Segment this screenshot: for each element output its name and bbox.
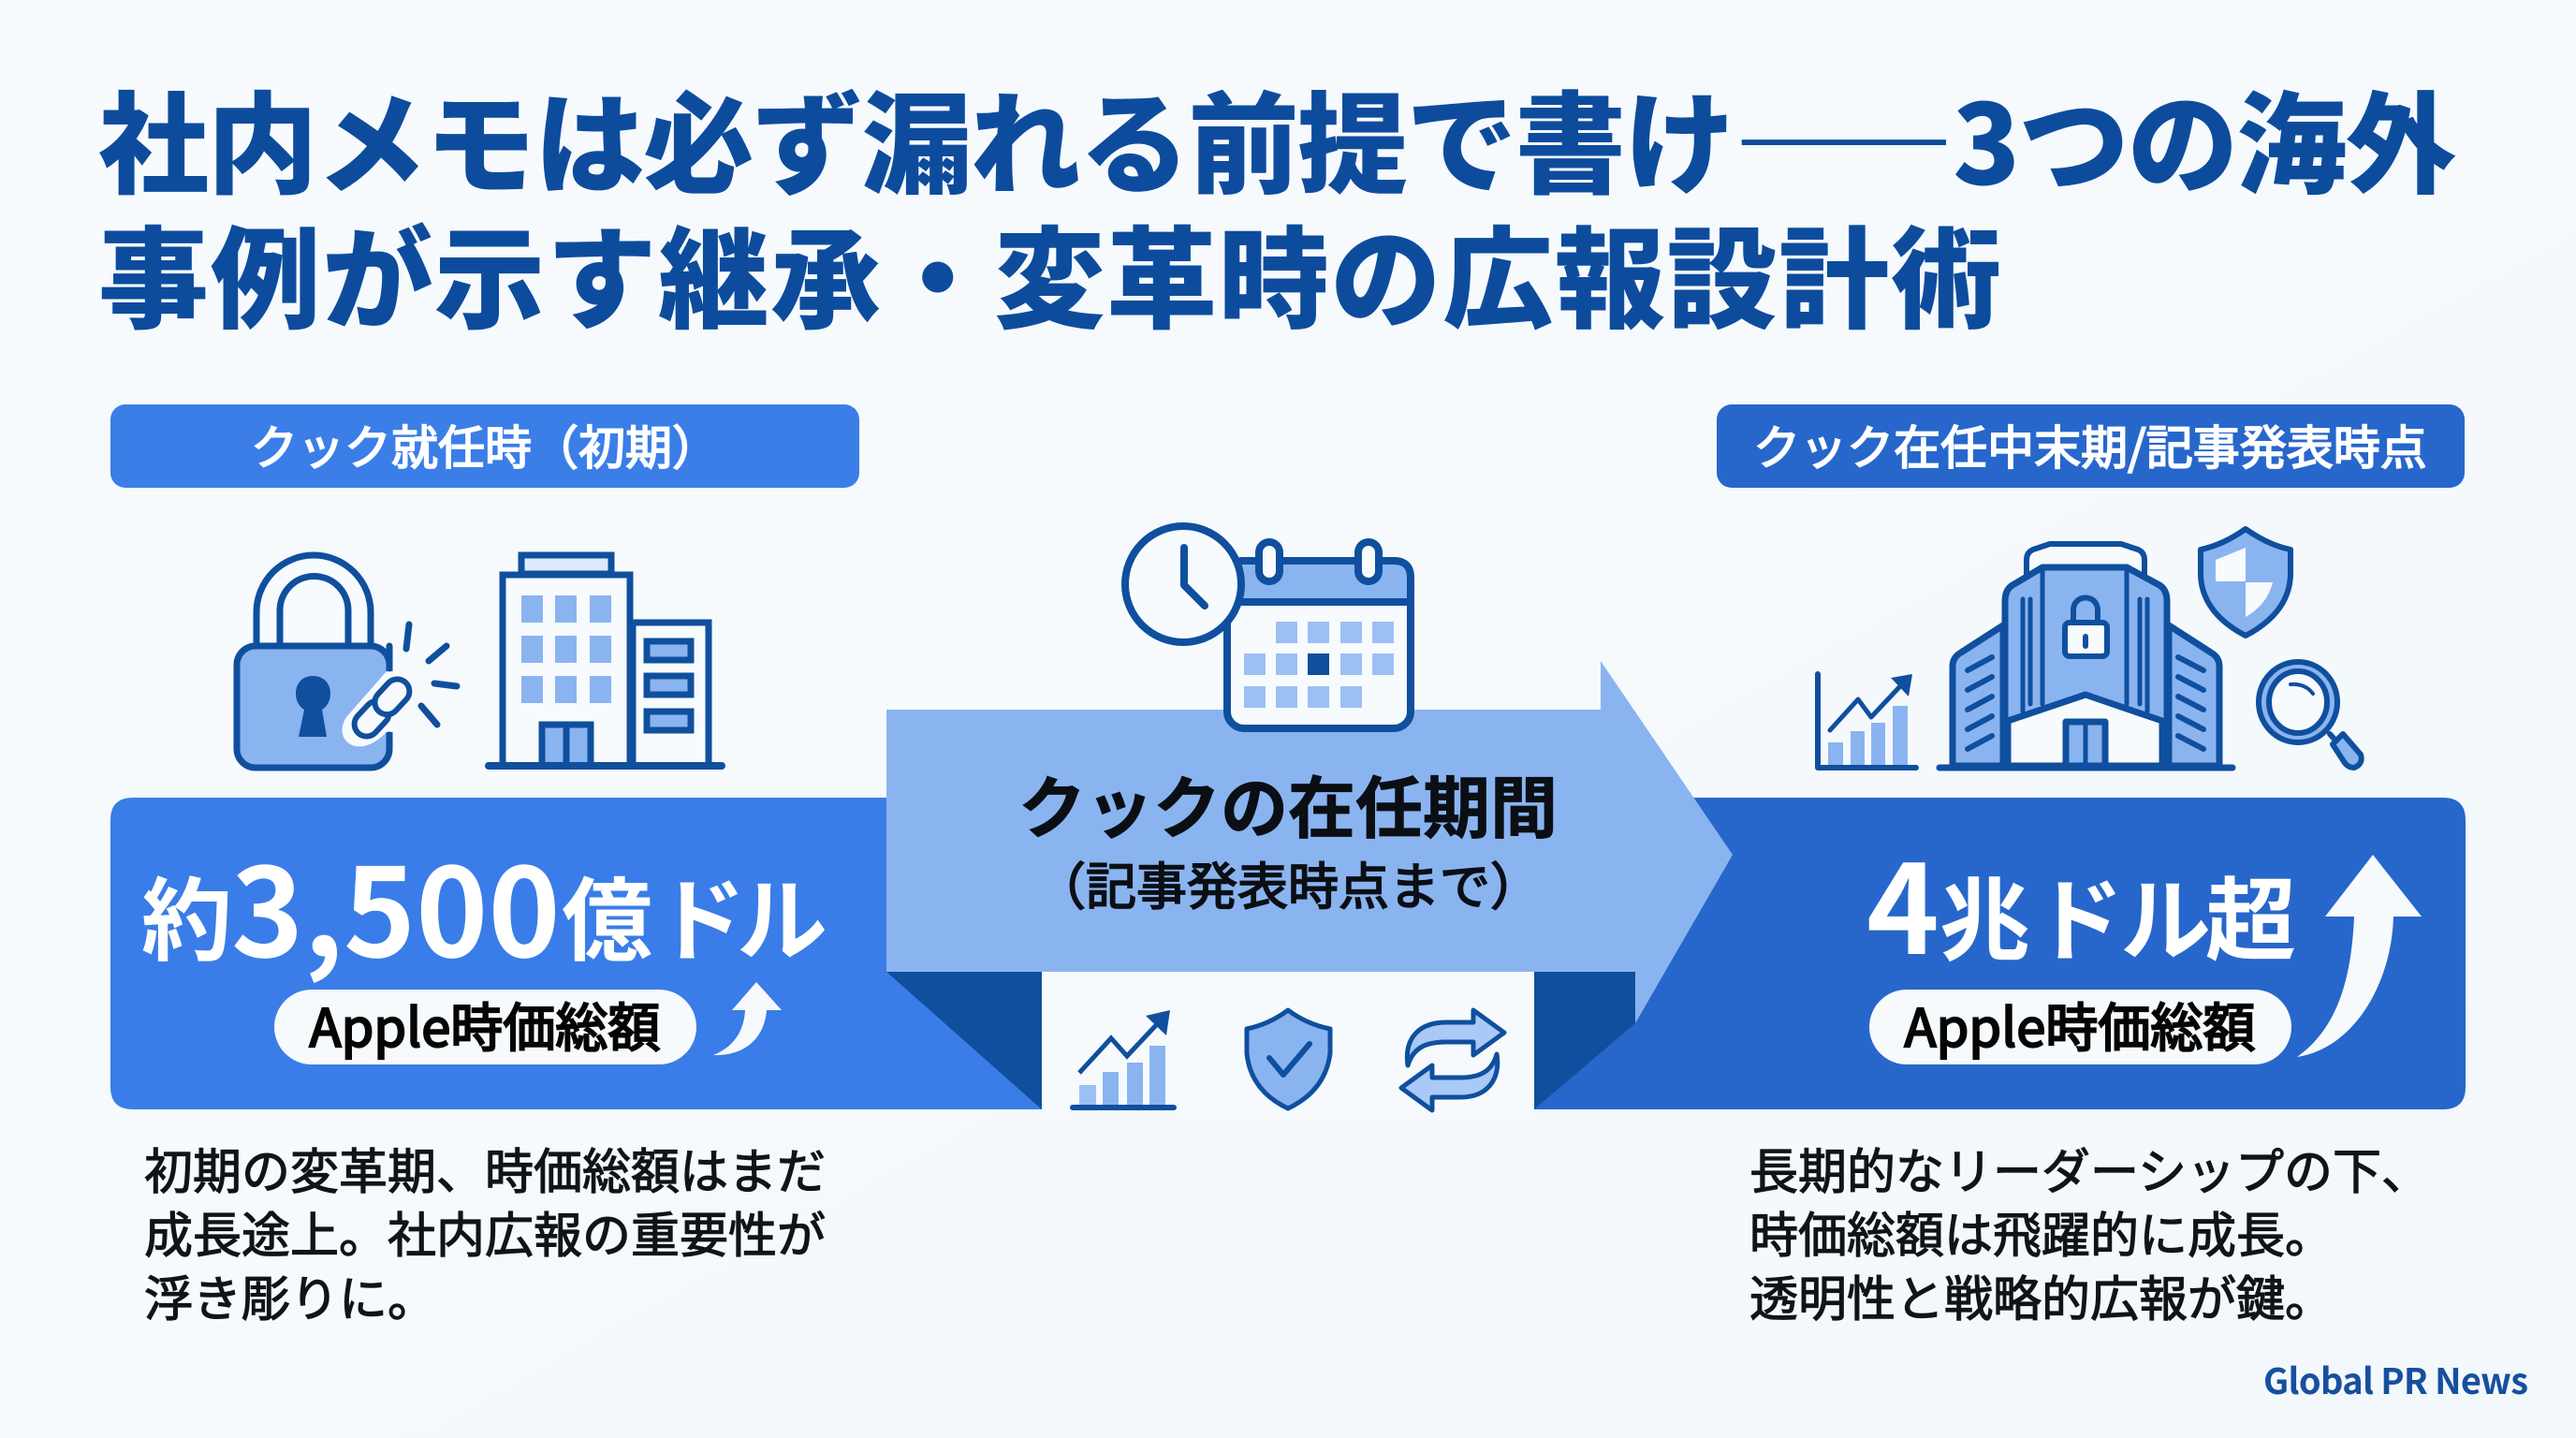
- center arrow text: クックの在任期間: [1018, 754, 1558, 852]
- icon: growth chart: [1818, 674, 1916, 768]
- icon: clock and calendar: [1125, 526, 1411, 728]
- source credit: Global PR News: [2263, 1353, 2528, 1404]
- fold shadow right: [1534, 972, 1635, 1109]
- text: right description: 透明性と戦略的広報が鍵。: [1749, 1260, 2334, 1330]
- big value: left: 3,500: [231, 814, 561, 992]
- big value: left: ドル: [655, 847, 827, 979]
- text: left description: 成長途上。社内広報の重要性が: [144, 1196, 826, 1267]
- icon: shield: [2201, 529, 2291, 636]
- icon: small growth chart: [1073, 1010, 1174, 1108]
- text: right description: [1749, 1133, 2430, 1330]
- fold shadow left: [886, 972, 1042, 1109]
- big value: left: 約: [141, 847, 232, 979]
- title: [98, 56, 2456, 351]
- icon: padlock with broken chain: [237, 555, 457, 768]
- title: 事例が示す継承・変革時の広報設計術: [98, 191, 2001, 351]
- text: left description: [144, 1133, 826, 1330]
- label: left period: クック就任時（初期）: [251, 411, 719, 478]
- text: left description: 浮き彫りに。: [144, 1260, 436, 1330]
- left value bar: [110, 798, 1042, 1109]
- title: 社内メモは必ず漏れる前提で書け——3つの海外: [98, 56, 2456, 216]
- text: left description: 初期の変革期、時価総額はまだ: [144, 1133, 826, 1203]
- center arrow text: （記事発表時点まで）: [1035, 845, 1541, 919]
- icon: large up arrow: [2297, 855, 2422, 1057]
- icon: check shield: [1247, 1010, 1330, 1108]
- icon: office buildings: [489, 555, 722, 766]
- icon: secure headquarters with chart, shield and magnifier: [1818, 529, 2362, 768]
- big value: left: 億: [562, 847, 652, 979]
- center arrow text: [1018, 754, 1558, 919]
- icon: headquarters building: [1939, 544, 2232, 768]
- label: right period: クック在任中末期/記事発表時点: [1753, 411, 2427, 478]
- icon: small up arrow: [713, 982, 782, 1055]
- icon: cycle arrows: [1401, 1010, 1504, 1110]
- text: right description: 長期的なリーダーシップの下、: [1749, 1133, 2430, 1203]
- big value: right: [1866, 812, 2296, 990]
- label: left period: [110, 404, 859, 488]
- gap below the arrow: [1042, 936, 1534, 1114]
- pill: right Apple market cap: Apple時価総額: [1904, 987, 2256, 1063]
- big value: right: ドル: [2033, 847, 2211, 979]
- big value: right: 4: [1866, 812, 1939, 990]
- pill: left Apple market cap: Apple時価総額: [309, 987, 661, 1063]
- center arrow: [886, 661, 1733, 1023]
- text: right description: 時価総額は飛躍的に成長。: [1749, 1196, 2334, 1267]
- big value: left: [141, 814, 827, 992]
- icon: magnifier: [2259, 662, 2362, 768]
- big value: right: 兆: [1939, 847, 2030, 979]
- right value bar: [1534, 798, 2466, 1109]
- big value: right: 超: [2205, 847, 2296, 979]
